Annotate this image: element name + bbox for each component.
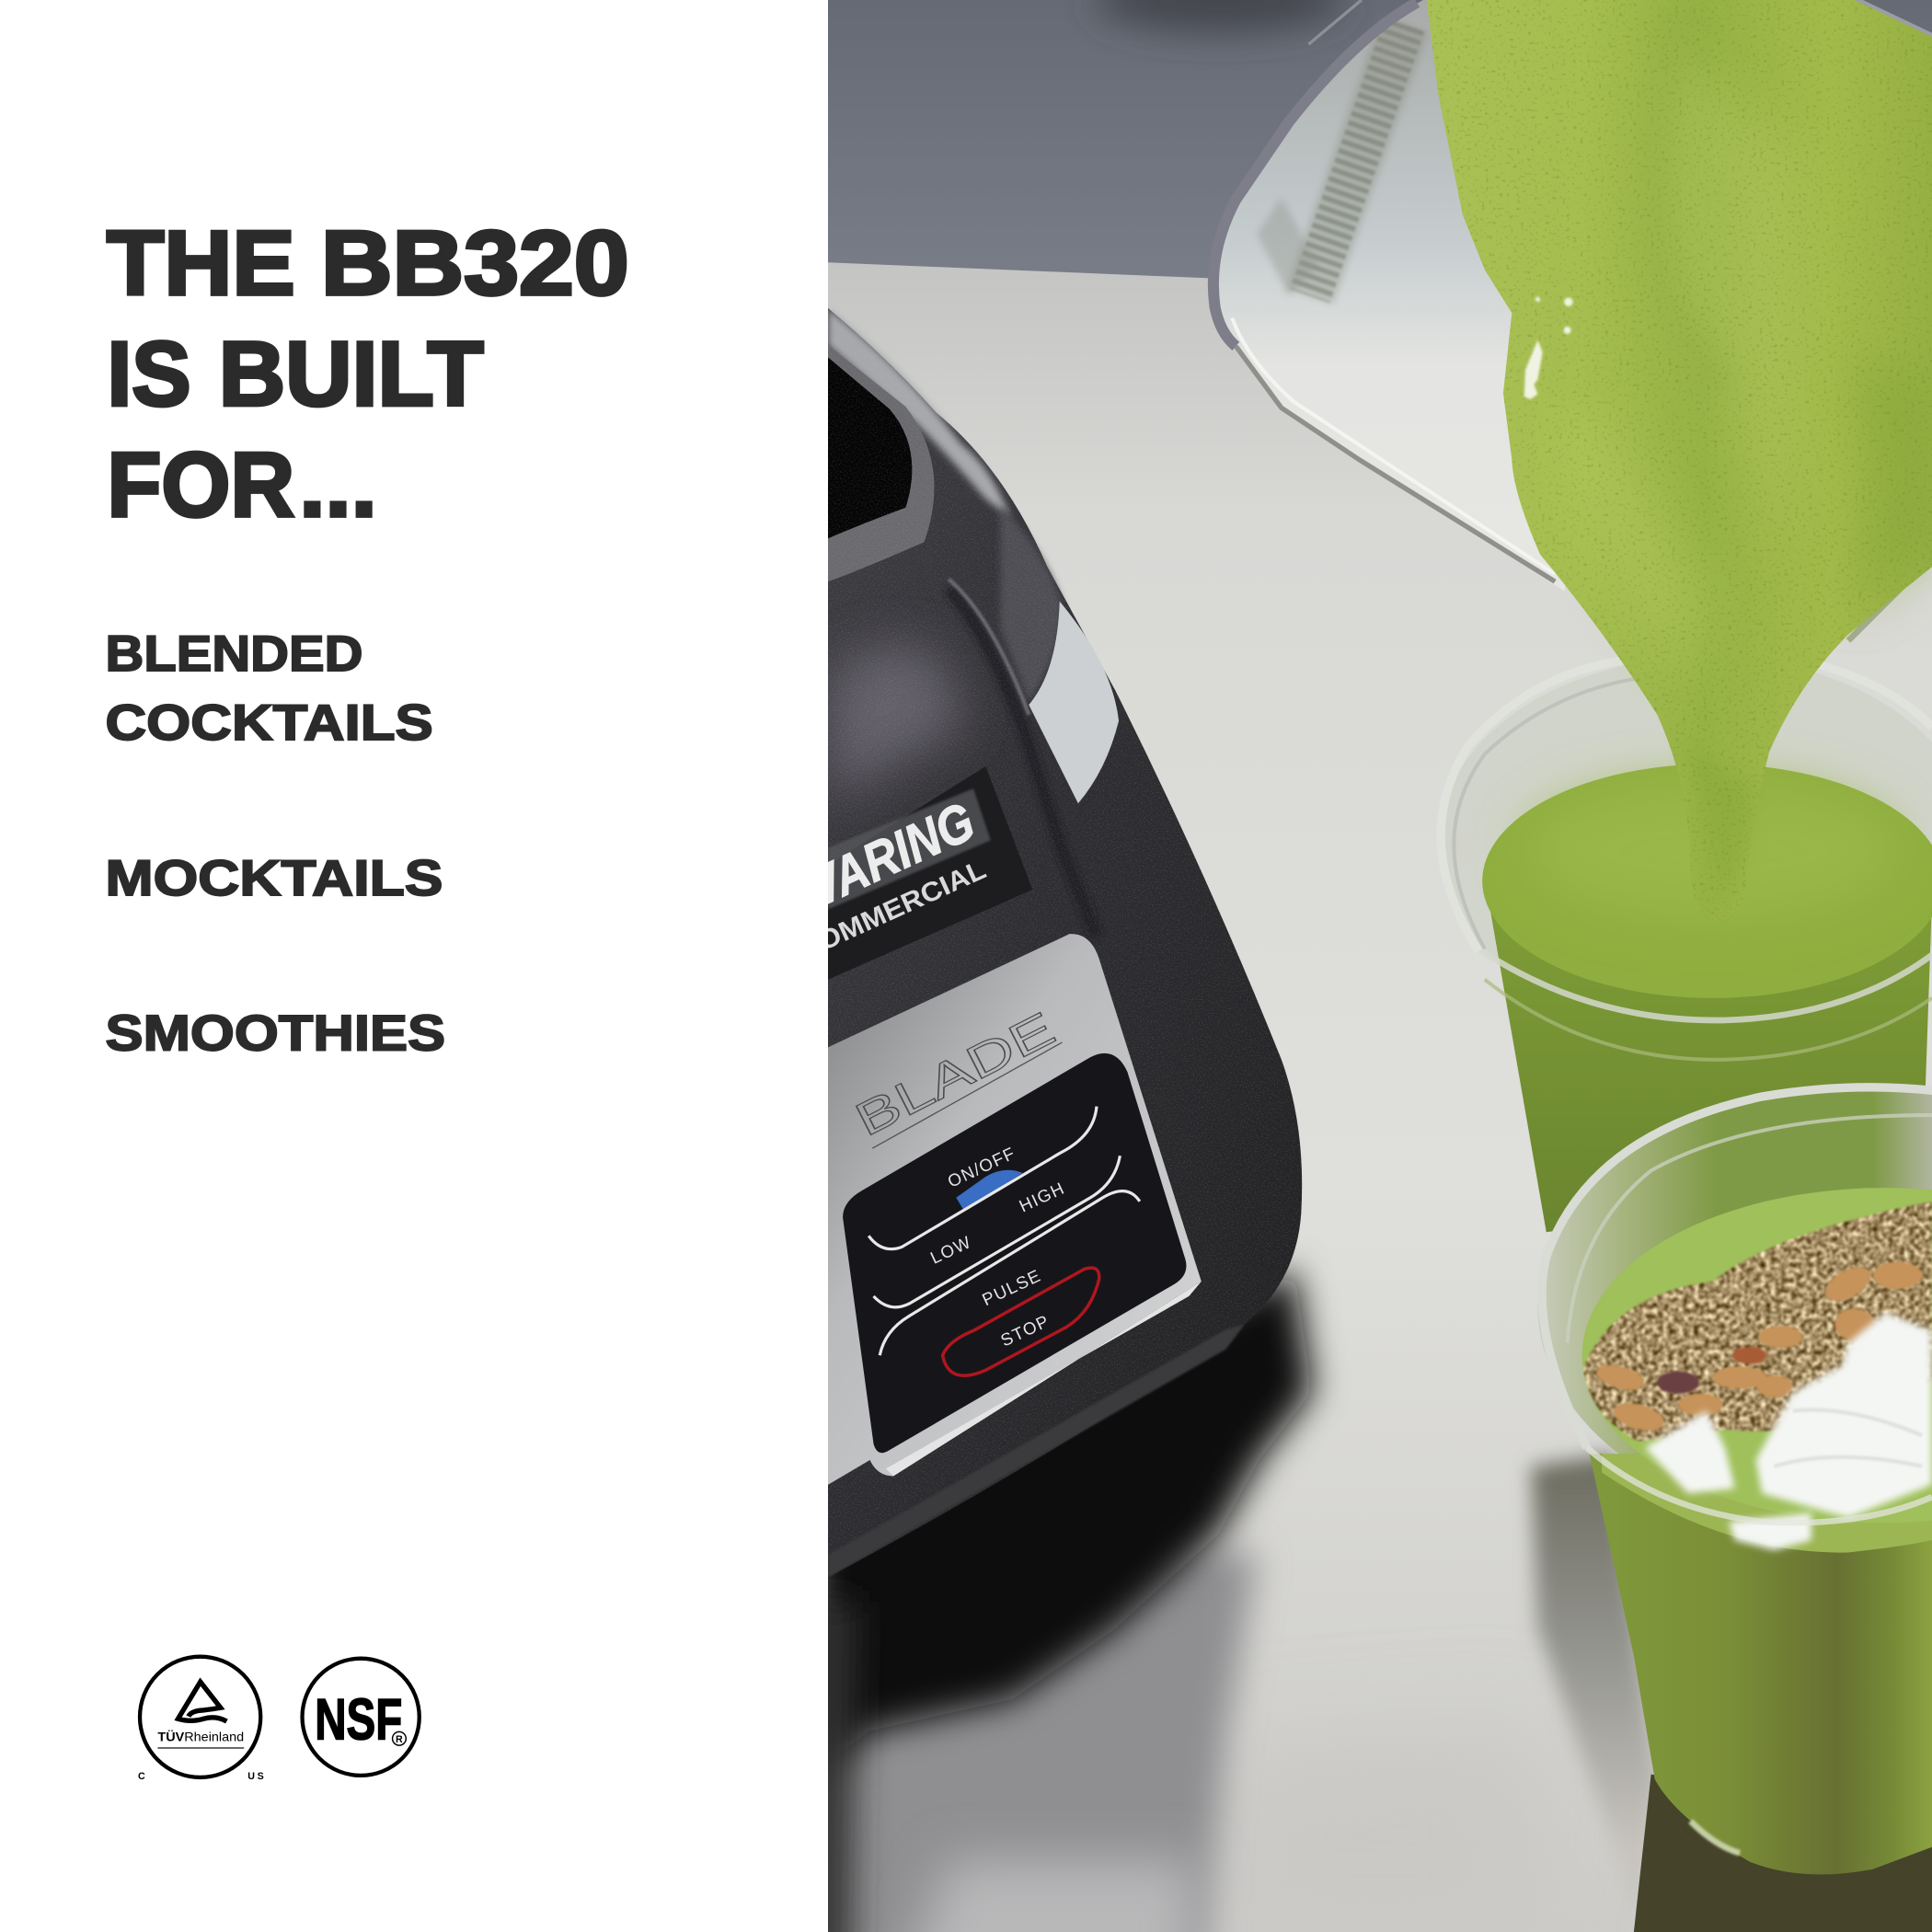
coconut flakes — [1645, 1312, 1932, 1550]
bowl cup body — [1590, 1454, 1932, 1874]
panel: product photo — [799, 0, 1932, 1932]
list of uses: COCKTAILS — [106, 694, 433, 751]
photo: bowl cup — [1532, 1087, 1932, 1932]
coconut flake shading — [1775, 1409, 1922, 1466]
blender: black button panel: HIGH — [1016, 1178, 1068, 1215]
granola and seeds — [1583, 1202, 1932, 1442]
photo: dark strip at image edge — [801, 1602, 857, 1932]
smoothie: shaded fold — [1651, 50, 1807, 579]
title: BB320 — [321, 213, 629, 315]
smoothie top surface — [1582, 1188, 1932, 1523]
dark streak on table by cup — [1532, 1454, 1657, 1922]
pitcher lower edge — [1236, 346, 1555, 581]
smoothie: splash highlights — [1524, 297, 1573, 399]
blender: silver control panel — [828, 934, 1202, 1485]
title: BUILT — [219, 324, 484, 426]
blender: body crease — [949, 589, 1097, 937]
lower cup reflection — [1634, 1775, 1932, 1932]
photo: table soft tone — [1207, 1725, 1540, 1932]
bowl cup rim — [1542, 1087, 1932, 1448]
pitcher measurement markings — [1310, 25, 1405, 295]
title: THE — [107, 213, 295, 315]
list of uses: SMOOTHIES — [106, 1005, 445, 1062]
blender: jar opening — [828, 357, 912, 538]
blender: logo plate: VARING — [799, 791, 983, 919]
photo: dark shape behind pitcher — [1097, 0, 1343, 32]
photo: lighter foot of reflection — [900, 1860, 1195, 1932]
smoothie front band — [1602, 1454, 1932, 1553]
blender: surface grain — [828, 308, 1308, 1577]
pitcher upper edge — [1213, 3, 1417, 346]
blender: black button panel: STOP — [997, 1311, 1052, 1350]
blender: logo plate — [799, 766, 1032, 980]
title — [107, 213, 629, 536]
blender: right side shoulder — [1001, 505, 1062, 702]
photo: tall cup — [1438, 657, 1932, 1232]
bowl glass interior — [1537, 1087, 1932, 1525]
blender: speckle highlight — [828, 643, 967, 801]
photo: pitcher glass — [1213, 0, 1932, 640]
left white panel — [0, 0, 828, 1932]
tall cup smoothie surface — [1482, 764, 1932, 998]
icon: NSF certification badge: NSF — [315, 1687, 402, 1752]
photo: grey lower reflection — [828, 1553, 1257, 1932]
icon: NSF certification badge — [303, 1659, 420, 1776]
list of uses — [106, 625, 445, 1062]
title: FOR — [108, 434, 294, 536]
smoothie: flecks — [1427, 0, 1932, 921]
list of uses: MOCKTAILS — [106, 849, 443, 906]
blender: black button panel: ON/OFF — [945, 1143, 1018, 1191]
pitcher back edge line — [1308, 0, 1362, 44]
title: ... — [299, 434, 377, 536]
icon: TUV Rheinland certification badge: C — [138, 1771, 145, 1782]
blender: bottom edge band — [828, 1325, 1245, 1577]
photo: steel table — [828, 262, 1932, 1932]
title: IS — [108, 324, 191, 426]
icon: TUV Rheinland certification badge — [138, 1657, 266, 1782]
blender: crease highlight — [949, 579, 1029, 715]
tall cup rim — [1478, 949, 1932, 1020]
blender: silver accent — [1029, 602, 1119, 803]
photo: background wall — [828, 0, 1932, 295]
blender: jar opening rim — [828, 345, 934, 581]
blender: black button panel: LOW — [927, 1232, 974, 1268]
blender: logo plate: OMMERCIAL — [813, 855, 991, 957]
blender: black button panel — [843, 1053, 1186, 1453]
blender: BLADE wordmark: BLADE — [847, 1002, 1063, 1146]
tall cup glass interior — [1438, 657, 1932, 1031]
cup bottom highlight — [1691, 1821, 1740, 1853]
icon: TUV Rheinland certification badge: US — [247, 1771, 266, 1782]
icon: TUV Rheinland certification badge: TÜVRheinland — [157, 1729, 244, 1744]
photo: blender base — [799, 308, 1308, 1577]
list of uses: BLENDED — [106, 625, 362, 682]
button: blue indicator — [956, 1170, 1023, 1210]
blender: BLADE wordmark — [847, 1002, 1063, 1148]
photo: blender reflection on table — [813, 1269, 1312, 1775]
tall cup body — [1489, 900, 1932, 1232]
blender: panel bright lower strip — [886, 1282, 1202, 1476]
photo: pouring smoothie — [1427, 0, 1932, 921]
blender: rim highlight — [828, 308, 1010, 517]
blender: black button panel: PULSE — [979, 1265, 1044, 1309]
icon: NSF certification badge: R — [396, 1734, 403, 1745]
